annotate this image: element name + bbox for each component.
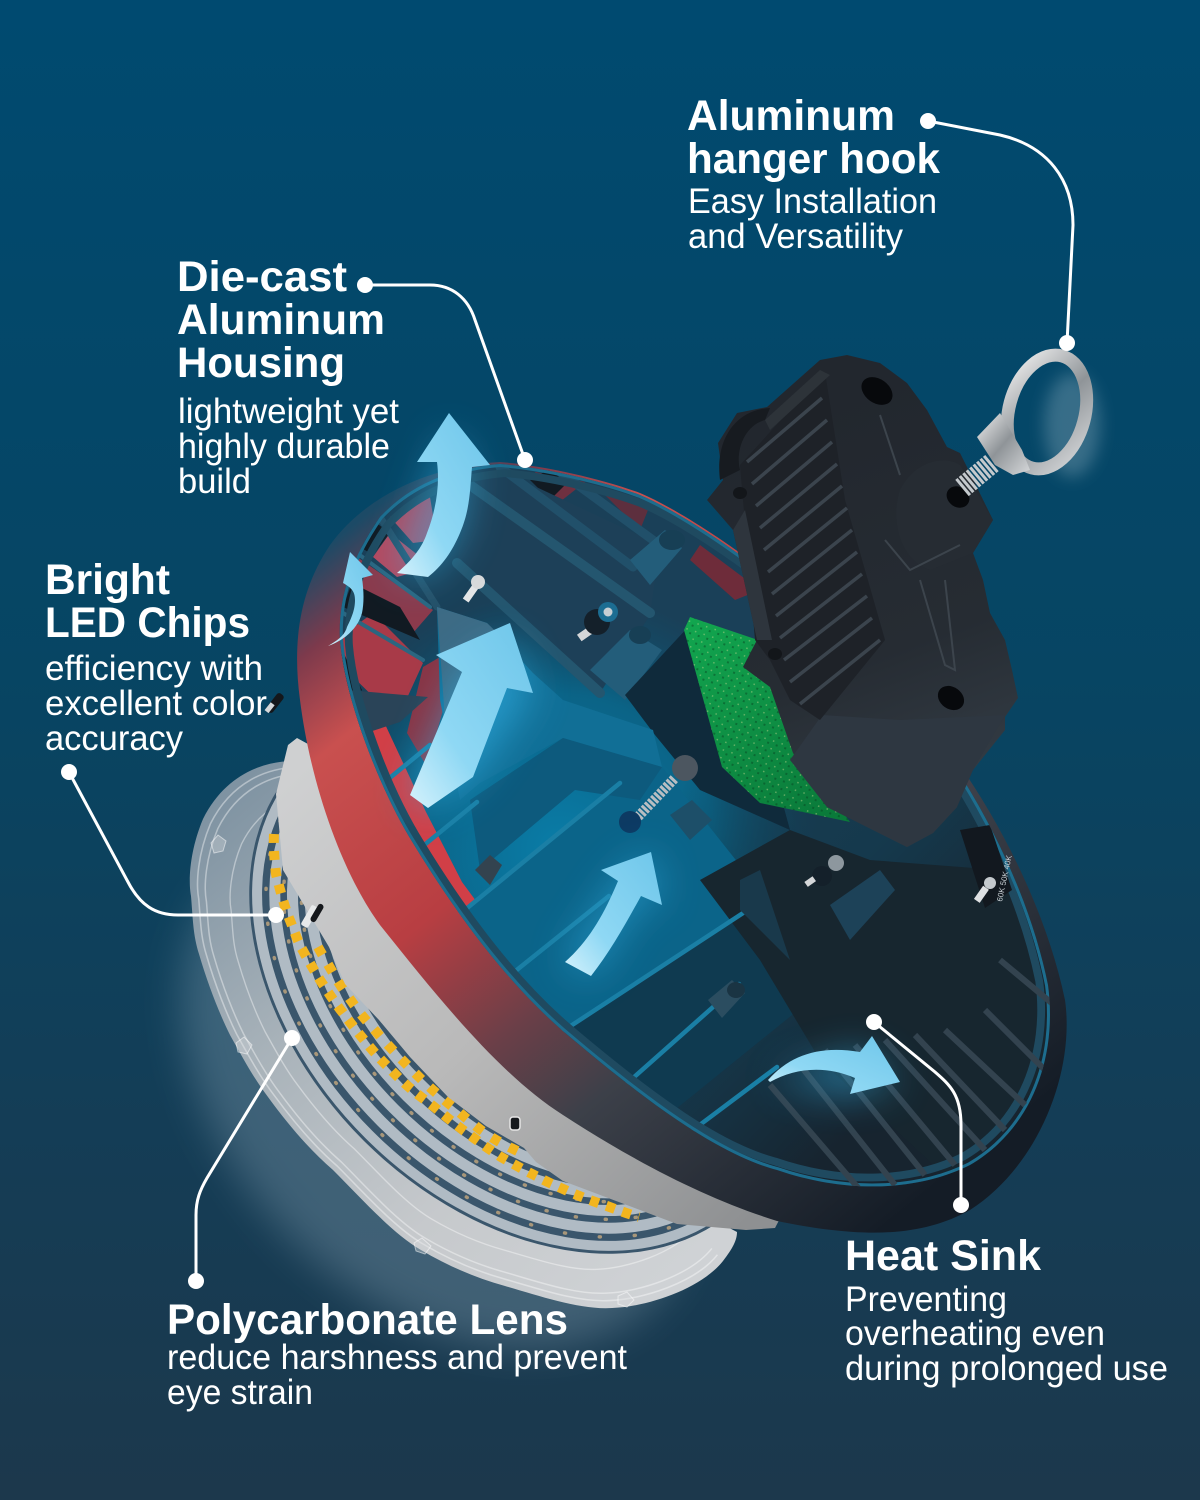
components xyxy=(684,617,850,822)
label: bright LED chips: accuracy xyxy=(45,719,183,758)
label: aluminum hanger hook: hanger hook xyxy=(687,135,940,183)
dark gaps at rim xyxy=(340,470,570,700)
label: aluminum hanger hook: Aluminum xyxy=(687,92,895,140)
board pin lower xyxy=(510,1117,520,1130)
label: bright LED chips xyxy=(45,556,267,758)
standoffs xyxy=(475,800,895,1018)
far right screw xyxy=(974,877,996,903)
housing xyxy=(297,462,1067,1233)
arrow glows xyxy=(397,430,900,1094)
arrow right xyxy=(768,1036,900,1094)
lens lugs xyxy=(211,835,634,1307)
driver body xyxy=(707,355,1018,847)
leader: heat sink xyxy=(866,1014,969,1213)
fin block xyxy=(740,372,885,720)
concentric LED rings xyxy=(249,791,711,1254)
arrow large curved xyxy=(397,413,490,577)
driver holes xyxy=(733,371,974,715)
leader: lens xyxy=(188,1030,300,1289)
interior base xyxy=(340,464,879,1028)
grey block xyxy=(437,607,494,713)
central teal bracket xyxy=(437,607,662,766)
eye bolt hook xyxy=(962,346,1099,488)
leader: housing xyxy=(357,277,533,468)
pocket xyxy=(470,738,662,870)
dark lower right xyxy=(678,795,1045,1184)
LED board xyxy=(276,738,800,1230)
leader: LED chips xyxy=(61,764,284,923)
lower teal ribs xyxy=(375,745,777,1130)
driver lower bulge xyxy=(790,715,1005,847)
driver surface crease xyxy=(880,415,960,670)
dark block behind PCB xyxy=(625,625,790,830)
screws xyxy=(463,575,996,903)
arrow centre xyxy=(565,852,662,976)
label: die-cast housing: highly durable xyxy=(178,427,390,466)
label: bright LED chips: LED Chips xyxy=(45,599,250,647)
label: heat sink: during prolonged use xyxy=(845,1349,1168,1388)
label: aluminum hanger hook: and Versatility xyxy=(688,217,903,256)
label: polycarbonate lens xyxy=(167,1296,627,1412)
lens body xyxy=(190,761,737,1308)
arrow large straight xyxy=(410,623,533,808)
red back wall patches xyxy=(340,467,760,767)
label: polycarbonate lens: eye strain xyxy=(167,1373,313,1412)
PCB xyxy=(684,617,850,822)
collar xyxy=(977,413,1030,475)
board pin upper xyxy=(301,903,325,928)
label: heat sink: overheating even xyxy=(845,1314,1105,1353)
label: die-cast housing: Housing xyxy=(177,339,345,387)
housing interior xyxy=(340,464,1050,1186)
glowing airflow arrows xyxy=(328,413,900,1094)
lower right fins xyxy=(770,960,1060,1190)
label: aluminum hanger hook: Easy Installation xyxy=(688,182,937,221)
label: heat sink: Preventing xyxy=(845,1280,1007,1319)
nut screw top xyxy=(577,602,618,641)
leader: hanger hook xyxy=(920,113,1075,351)
LED chips xyxy=(274,834,639,1217)
upper fin edges xyxy=(343,467,657,693)
label: polycarbonate lens: Polycarbonate Lens xyxy=(167,1296,568,1344)
top rib xyxy=(765,370,830,430)
cylinder boss xyxy=(896,460,993,570)
small white screw xyxy=(463,575,485,602)
thread xyxy=(962,463,992,488)
right standoff boss xyxy=(590,530,685,700)
label: aluminum hanger hook xyxy=(687,92,940,256)
label: die-cast housing: Die-cast xyxy=(177,253,347,301)
label: heat sink: Heat Sink xyxy=(845,1232,1041,1280)
aluminum driver housing xyxy=(707,355,1018,847)
label: die-cast housing: build xyxy=(178,462,251,501)
fins xyxy=(747,398,880,704)
bright red strip along rim xyxy=(372,726,510,978)
eye bolt glow xyxy=(1044,373,1100,477)
right nut screw xyxy=(804,855,844,887)
lens edge lines xyxy=(198,767,717,1301)
rating text: 60K 50K 40K xyxy=(995,854,1014,902)
arrow small curved xyxy=(328,552,373,646)
teal centre xyxy=(363,623,774,1028)
upper fin slabs xyxy=(483,477,631,688)
top gasket xyxy=(719,408,770,480)
board xyxy=(684,617,850,822)
long screw xyxy=(619,755,698,833)
central floor panel xyxy=(460,791,736,1024)
label: heat sink xyxy=(845,1232,1168,1388)
inner ring lines xyxy=(340,464,1050,1186)
loose pin near LED label xyxy=(265,692,285,714)
label: polycarbonate lens: reduce harshness and prevent xyxy=(167,1338,627,1377)
lower floor panel xyxy=(573,924,792,1108)
lower dark floor xyxy=(700,830,1011,1052)
ring xyxy=(995,346,1099,478)
label: die-cast housing: Aluminum xyxy=(177,296,385,344)
driver label block xyxy=(960,825,1012,908)
polycarbonate lens and LED board xyxy=(190,738,778,1308)
lower left bracket xyxy=(347,690,428,735)
side flange xyxy=(733,510,772,640)
label: die-cast housing xyxy=(177,253,399,501)
label: bright LED chips: efficiency with xyxy=(45,649,263,688)
label: bright LED chips: excellent color xyxy=(45,684,267,723)
lens glow xyxy=(79,729,801,1451)
housing rim xyxy=(297,462,1067,1233)
label: bright LED chips: Bright xyxy=(45,556,170,604)
label: die-cast housing: lightweight yet xyxy=(178,392,399,431)
